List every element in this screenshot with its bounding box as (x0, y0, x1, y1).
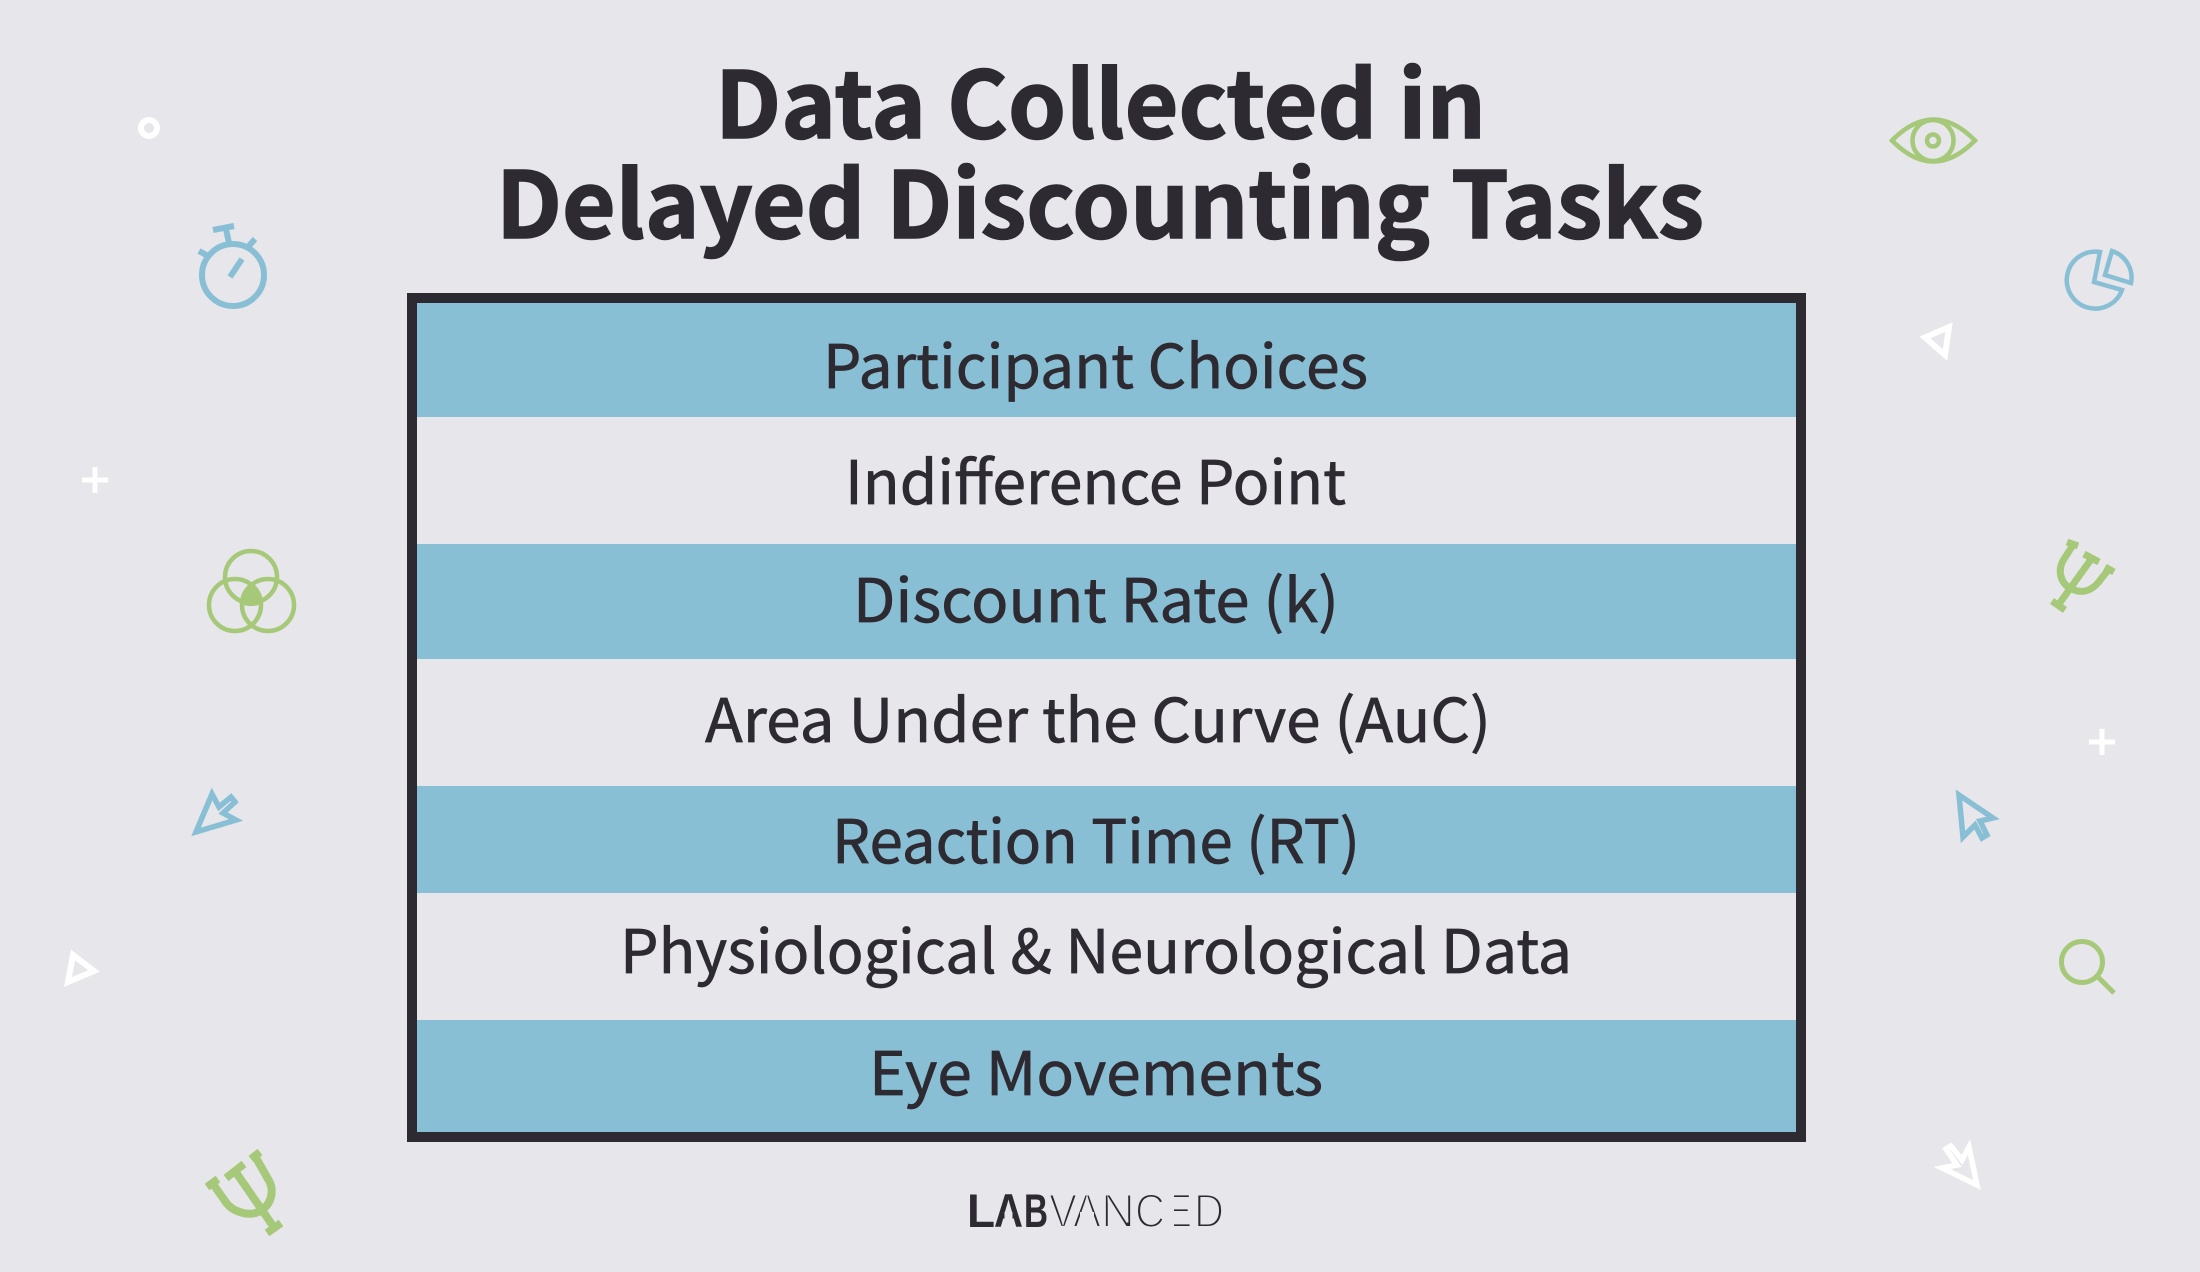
icon: white cursor (1942, 1146, 1977, 1185)
title: Data Collected in (715, 32, 1486, 165)
logo: Labvanced: D (1194, 1184, 1224, 1237)
icon: white plus right (2089, 729, 2115, 755)
row: Physiological & Neurological Data: Physiological & Neurological Data (620, 904, 1572, 991)
logo: Labvanced: A (1073, 1184, 1102, 1237)
icon: white ring (141, 120, 157, 136)
row: Participant Choices (417, 303, 1796, 417)
icon: eye (1892, 120, 1975, 162)
logo: Labvanced: V (1049, 1184, 1078, 1237)
icon: white triangle right (1925, 327, 1949, 355)
icon: white triangle left (68, 955, 94, 982)
logo: Labvanced: E (1167, 1184, 1192, 1237)
row: Reaction Time (RT) (417, 786, 1796, 893)
icon: pie chart (2067, 251, 2132, 309)
icon: psi left (207, 1152, 281, 1233)
logo: Labvanced (967, 1184, 1224, 1237)
row: Eye Movements (417, 1020, 1796, 1132)
logo: Labvanced: C (1135, 1184, 1165, 1237)
row: Area Under the Curve (AuC): Area Under the Curve (AuC) (705, 673, 1491, 760)
icon: blue cursor left (196, 794, 236, 832)
icon: white plus left (82, 467, 108, 493)
icon: magnifier (2062, 942, 2114, 993)
logo: Labvanced: L (967, 1184, 995, 1237)
title: Delayed Discounting Tasks (496, 132, 1704, 265)
logo: Labvanced: A (994, 1184, 1023, 1237)
row: Reaction Time (RT): Reaction Time (RT) (832, 794, 1360, 881)
row: Indifference Point: Indifference Point (845, 435, 1346, 522)
row: Participant Choices: Participant Choices (823, 319, 1368, 406)
logo: Labvanced: B (1024, 1184, 1048, 1237)
icon: stopwatch (199, 226, 264, 306)
logo: Labvanced: N (1101, 1184, 1135, 1237)
row: Eye Movements: Eye Movements (869, 1026, 1323, 1113)
icon: blue cursor right (1959, 795, 1993, 838)
row: Discount Rate (k): Discount Rate (k) (853, 553, 1339, 640)
row: Discount Rate (k) (417, 544, 1796, 659)
icon: psi right (2052, 542, 2114, 610)
panel: data table (407, 293, 1806, 1142)
title (496, 32, 1704, 265)
icon: venn diagram (209, 551, 294, 631)
